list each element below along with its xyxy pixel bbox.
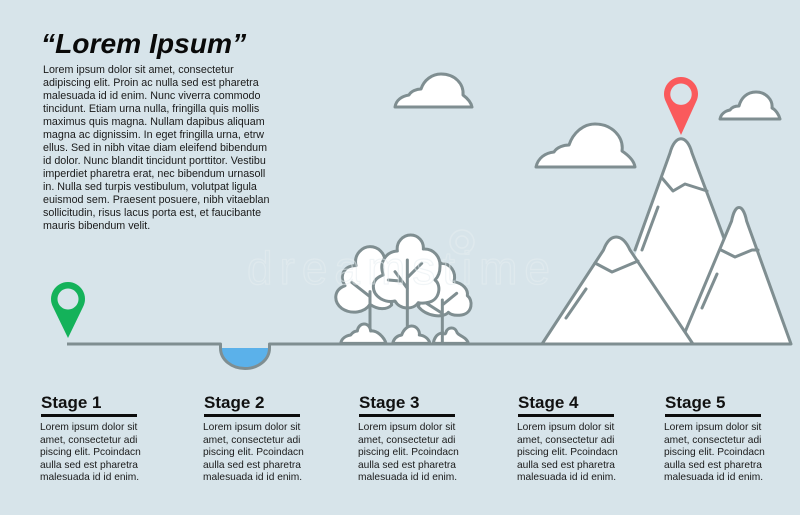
intro paragraph: imperdiet pharetra erat, nec bibendum urnasoll: [43, 168, 265, 180]
intro paragraph: ellus. Sed in nibh vitae diam eleifend bibendum: [43, 142, 267, 154]
panel: stage 1: Stage 1: [41, 393, 101, 412]
tree: right: [418, 262, 471, 342]
panel: stage 4: piscing elit. Pcoindacn: [517, 447, 618, 458]
panel: stage 3: Stage 3: [359, 393, 419, 412]
intro paragraph: in. Nulla sed turpis vestibulum, volutpat ligula: [43, 181, 257, 193]
panel: stage 2: aulla sed est pharetra: [203, 460, 301, 471]
panel: stage 1: piscing elit. Pcoindacn: [40, 447, 141, 458]
panel: stage 3: malesuada id id enim.: [358, 472, 457, 483]
panel: stage 1: amet, consectetur adi: [40, 435, 137, 446]
panel: stage 4: malesuada id id enim.: [517, 472, 616, 483]
cloud: small right: [720, 92, 780, 119]
intro paragraph: Lorem ipsum dolor sit amet, consectetur: [43, 64, 234, 76]
panel: stage 5: [664, 393, 765, 483]
panel: stage 5: piscing elit. Pcoindacn: [664, 447, 765, 458]
panel: stage 3: aulla sed est pharetra: [358, 460, 456, 471]
intro paragraph: adipiscing elit. Proin ac nulla sed est pharetra: [43, 77, 259, 89]
panel: stage 1: aulla sed est pharetra: [40, 460, 138, 471]
intro paragraph: [43, 64, 269, 232]
mountain: left: [542, 237, 693, 344]
intro paragraph: id dolor. Nunc blandit tincidunt porttitor. Vestibu: [43, 155, 266, 167]
panel: stage 2: malesuada id id enim.: [203, 472, 302, 483]
panel: stage 1: Lorem ipsum dolor sit: [40, 422, 137, 433]
mountain: tall middle: [620, 139, 740, 344]
ground line and pond: [67, 344, 791, 368]
panel: stage 2: amet, consectetur adi: [203, 435, 300, 446]
panel: stage 5: amet, consectetur adi: [664, 435, 761, 446]
trees and bushes: [336, 235, 471, 343]
panel: stage 3: amet, consectetur adi: [358, 435, 455, 446]
intro paragraph: tincidunt. Etiam urna nulla, fringilla quis mollis: [43, 103, 259, 115]
panel: stage 3: [358, 393, 459, 483]
intro paragraph: mauris bibendum velit.: [43, 220, 150, 232]
title: “Lorem Ipsum”: [41, 27, 246, 59]
intro paragraph: magna ac dignissim. In eget fringilla urna, etrw: [43, 129, 264, 141]
intro paragraph: malesuada id id enim. Nunc viverra commodo: [43, 90, 260, 102]
intro paragraph: euismod sem. Praesent posuere, nibh vitaeblan: [43, 194, 269, 206]
mountain: right: [680, 208, 791, 344]
bushes: [341, 324, 468, 343]
panel: stage 2: piscing elit. Pcoindacn: [203, 447, 304, 458]
panel: stage 4: amet, consectetur adi: [517, 435, 614, 446]
panel: stage 2: [203, 393, 304, 483]
panel: stage 2: Lorem ipsum dolor sit: [203, 422, 300, 433]
tree: middle: [373, 235, 440, 342]
intro paragraph: maximus quis magna. Nullam dapibus aliquam: [43, 116, 265, 128]
cloud: small centre-left: [395, 74, 472, 107]
panel: stage 4: Stage 4: [518, 393, 578, 412]
panel: stage 4: aulla sed est pharetra: [517, 460, 615, 471]
watermark: dreamstime: [247, 242, 550, 294]
panel: stage 4: [517, 393, 618, 483]
panel: stage 5: aulla sed est pharetra: [664, 460, 762, 471]
start pin: green: [51, 282, 85, 338]
panel: stage 5: malesuada id id enim.: [664, 472, 763, 483]
intro paragraph: sollicitudin, risus lacus porta est, et faucibante: [43, 207, 261, 219]
panel: stage 4: Lorem ipsum dolor sit: [517, 422, 614, 433]
panel: stage 3: piscing elit. Pcoindacn: [358, 447, 459, 458]
panel: stage 5: Lorem ipsum dolor sit: [664, 422, 761, 433]
panel: stage 3: Lorem ipsum dolor sit: [358, 422, 455, 433]
panel: stage 1: malesuada id id enim.: [40, 472, 139, 483]
cloud: large centre: [536, 124, 635, 167]
panel: stage 1: [40, 393, 141, 483]
tree: left: [336, 247, 392, 342]
panel: stage 5: Stage 5: [665, 393, 725, 412]
panel: stage 2: Stage 2: [204, 393, 264, 412]
finish pin: red: [664, 77, 698, 135]
